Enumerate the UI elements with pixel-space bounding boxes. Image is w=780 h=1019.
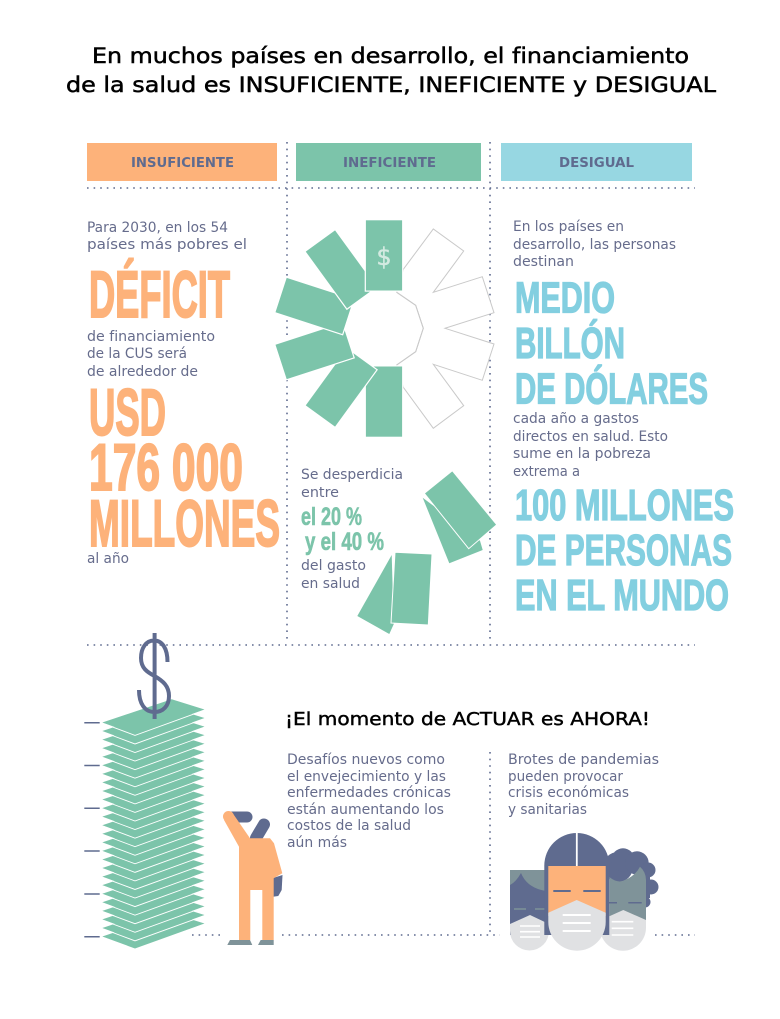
text block: déficit: DÉFICIT [89,257,230,331]
text block: desperdicio: Se desperdicia [301,467,403,483]
heading: ineficiente [296,143,481,181]
title: En muchos países en desarrollo, el financiamiento [92,44,689,68]
text block: pandemias: crisis económicas [508,785,629,801]
text block: déficit: de financiamiento [87,329,215,345]
heading: desigual: DESIGUAL [559,156,634,171]
title: de la salud es INSUFICIENTE, INEFICIENTE y DESIGUAL [66,73,716,97]
title [66,44,716,97]
heading: actuar: ¡El momento de ACTUAR es AHORA! [285,709,650,730]
text block: gastos directos: directos en salud. Esto [513,429,668,445]
text block: pandemias: pueden provocar [508,769,623,785]
text block: déficit: al año [87,551,129,567]
text block: desperdicio: y el 40 % [305,528,384,556]
text block: desperdicio: del gasto [301,558,366,574]
panel: insuficiente [87,143,280,567]
heading: insuficiente [87,143,277,181]
text block: pandemias: Brotes de pandemias [508,752,659,768]
text block: déficit: de alrededor de [87,364,198,380]
text block: desperdicio: entre [301,485,339,501]
text block: déficit: 176 000 [89,430,243,504]
text block: gastos directos: cada año a gastos [513,411,639,427]
text block: gastos directos: sume en la pobreza [513,446,651,462]
panel: ineficiente [275,143,497,634]
text block: déficit: países más pobres el [87,237,247,253]
text block: gastos directos: BILLÓN [515,318,625,368]
text block: desafíos: enfermedades crónicas [287,785,451,801]
text block: gastos directos: destinan [513,254,574,270]
text block: gastos directos [513,219,734,620]
text block: desafíos: Desafíos nuevos como [287,752,445,768]
chart: money wheel [275,220,494,437]
chart: money wheel: $ [376,243,392,271]
text block: gastos directos: MEDIO [515,274,615,322]
heading: desigual [501,143,692,181]
text block: pandemias [508,752,659,818]
text block: gastos directos: extrema a [513,464,580,480]
text block: déficit [87,220,280,567]
icon: people with masks [510,833,658,951]
text block: desafíos: costos de la salud [287,818,411,834]
panel: desigual [501,143,734,620]
text block: déficit: de la CUS será [87,346,187,362]
text block: gastos directos: En los países en [513,219,624,235]
heading: ineficiente: INEFICIENTE [343,156,436,171]
heading: insuficiente: INSUFICIENTE [131,156,234,171]
text block: pandemias: y sanitarias [508,802,587,818]
icon: person looking up [223,811,282,945]
text block: desperdicio [301,467,403,592]
text block: desafíos: el envejecimiento y las [287,769,446,785]
text block: déficit: Para 2030, en los 54 [87,220,228,236]
icon: falling bills [357,471,497,634]
text block: déficit: USD [89,375,166,449]
text block: déficit: MILLONES [89,486,280,560]
text block: desperdicio: el 20 % [301,503,362,531]
text block: desperdicio: en salud [301,576,360,592]
text block: gastos directos: desarrollo, las personas [513,237,676,253]
text block: desafíos [287,752,451,851]
text block: desafíos: están aumentando los [287,802,444,818]
icon: stack of money [84,633,204,949]
text block: desafíos: aún más [287,835,347,851]
